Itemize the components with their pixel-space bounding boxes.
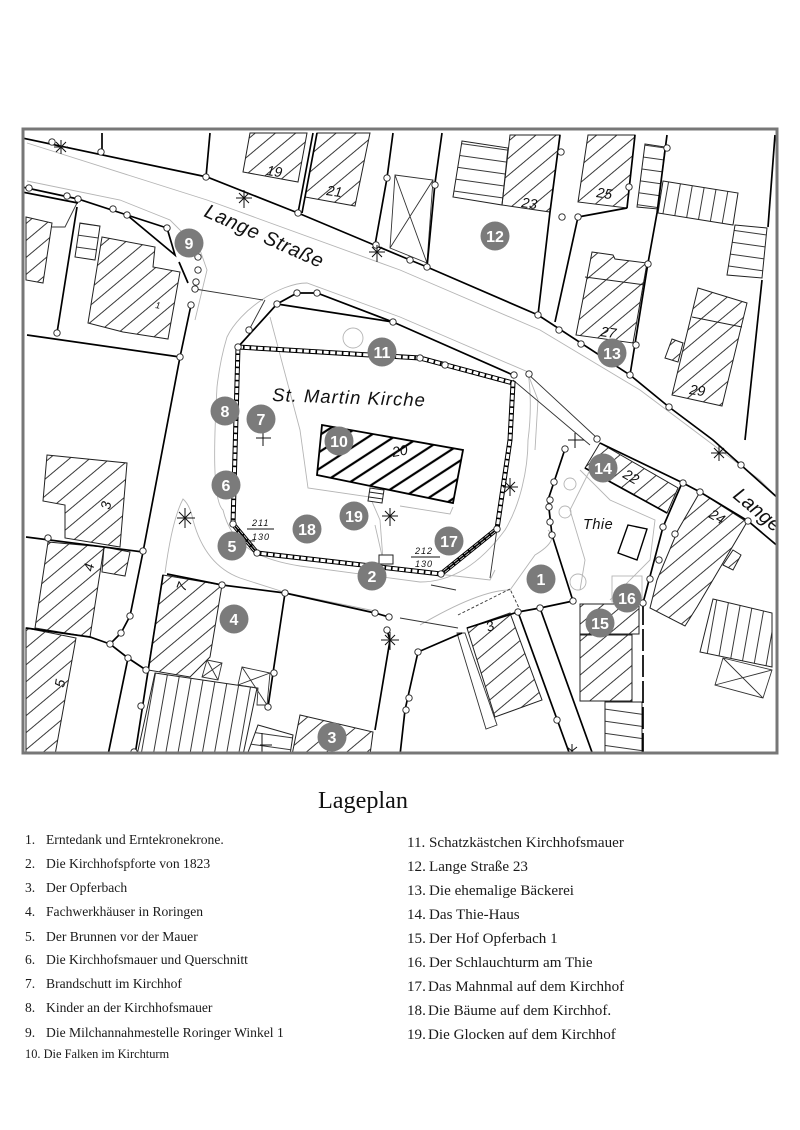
numbered markers: 16 [618, 591, 636, 608]
legend: right column: 19. [407, 1027, 426, 1043]
numbered markers: 9 [185, 236, 194, 253]
legend: right column: 12. [407, 859, 426, 875]
hatched buildings [26, 133, 747, 755]
house numbers: 19 [266, 162, 283, 180]
crossed boxes [52, 175, 772, 729]
legend: left column: Die Kirchhofsmauer und Querschnitt [46, 952, 248, 967]
legend: left column: Erntedank und Erntekronekrone. [46, 832, 224, 847]
legend: right column: Das Mahnmal auf dem Kirchhof [428, 979, 625, 995]
numbered markers: 6 [222, 478, 231, 495]
house numbers: 7 [173, 579, 191, 593]
measurement notes [247, 518, 440, 569]
church building [317, 425, 463, 503]
numbered markers: 5 [228, 539, 237, 556]
church steps and gate [368, 488, 393, 564]
street and place names: St. Martin Kirche [272, 384, 426, 410]
legend: left column: Der Opferbach [46, 880, 127, 895]
numbered markers: 11 [374, 345, 391, 362]
numbered markers: 4 [230, 612, 239, 629]
legend: left column: Fachwerkhäuser in Roringen [46, 904, 203, 919]
legend: left column [25, 832, 284, 1061]
numbered markers: 2 [368, 569, 377, 586]
boundary marker dots [26, 139, 751, 755]
curbs and paths [27, 143, 780, 625]
legend: right column: Die Bäume auf dem Kirchhof. [428, 1003, 611, 1019]
roads and property lines [22, 133, 780, 755]
legend: right column: 18. [407, 1003, 426, 1019]
numbered markers: 8 [221, 404, 230, 421]
legend: right column: 11. [407, 835, 425, 851]
numbered markers [174, 222, 642, 752]
house numbers: 22 [620, 465, 642, 487]
street and place names [201, 200, 786, 537]
house numbers: 3 [484, 617, 497, 635]
legend: left column: Die Milchannahmestelle Roringer Winkel 1 [46, 1025, 284, 1040]
legend: left column: 6. [25, 952, 35, 967]
numbered markers: 19 [345, 509, 363, 526]
legend: right column: Die ehemalige Bäckerei [429, 883, 574, 899]
legend: left column: 8. [25, 1000, 35, 1015]
legend: right column: 15. [407, 931, 426, 947]
street and place names: Lange Straße [201, 200, 327, 273]
legend: right column: 17. [407, 979, 426, 995]
numbered markers: 13 [603, 346, 621, 363]
legend: right column [407, 835, 625, 1043]
numbered markers: 7 [257, 412, 266, 429]
measurement notes: 212 [414, 546, 433, 556]
legend: left column: 9. [25, 1025, 35, 1040]
churchyard wall [233, 347, 513, 574]
legend: left column: Brandschutt im Kirchhof [46, 976, 182, 991]
numbered markers: 10 [330, 434, 348, 451]
house numbers: 4 [80, 562, 97, 573]
legend: right column: Schatzkästchen Kirchhofsmauer [429, 835, 624, 851]
measurement notes: 211 [251, 518, 269, 528]
numbered markers: 1 [537, 572, 546, 589]
legend: right column: 16. [407, 955, 426, 971]
house numbers: 1 [155, 300, 161, 311]
legend: right column: 13. [407, 883, 426, 899]
striped outbuildings [75, 141, 772, 755]
site plan map [22, 128, 778, 754]
legend: left column: Kinder an der Kirchhofsmauer [46, 1000, 213, 1015]
street and place names: Lange [729, 484, 786, 537]
legend: right column: Lange Straße 23 [429, 859, 528, 875]
map frame [23, 129, 777, 753]
house numbers: 5 [51, 678, 68, 689]
legend: left column: 7. [25, 976, 35, 991]
legend: right column: 14. [407, 907, 426, 923]
numbered markers: 3 [328, 730, 337, 747]
numbered markers: 17 [440, 534, 458, 551]
legend: left column: Der Brunnen vor der Mauer [46, 929, 198, 944]
legend: left column: 1. [25, 832, 35, 847]
legend: left column: 5. [25, 929, 35, 944]
house numbers: 24 [706, 505, 728, 527]
street and place names: Thie [583, 517, 613, 533]
house numbers: 21 [325, 182, 343, 200]
legend: right column: Der Schlauchturm am Thie [429, 955, 593, 971]
numbered markers: 12 [486, 229, 504, 246]
numbered markers: 14 [594, 461, 612, 478]
house numbers: 3 [97, 500, 114, 511]
legend: left column: 4. [25, 904, 35, 919]
house numbers: 27 [599, 323, 618, 341]
legend: right column: Die Glocken auf dem Kirchhof [428, 1027, 617, 1043]
house numbers [51, 162, 728, 689]
numbered markers: 15 [591, 616, 609, 633]
measurement notes: 130 [252, 532, 270, 542]
numbered markers: 18 [298, 522, 316, 539]
house numbers: 20 [390, 441, 409, 460]
house numbers: 29 [688, 381, 706, 399]
house numbers: 23 [520, 194, 538, 212]
tree and lamp symbols [54, 140, 727, 755]
legend: left column: 3. [25, 880, 35, 895]
measurement notes: 130 [415, 559, 433, 569]
legend: right column: Das Thie-Haus [429, 907, 520, 923]
legend: left column: 10. Die Falken im Kirchturm [25, 1047, 170, 1061]
legend: left column: Die Kirchhofspforte von 1823 [46, 856, 210, 871]
house numbers: 25 [595, 184, 613, 202]
title: Lageplan [318, 787, 408, 814]
legend: right column: Der Hof Opferbach 1 [429, 931, 558, 947]
legend: left column: 2. [25, 856, 35, 871]
